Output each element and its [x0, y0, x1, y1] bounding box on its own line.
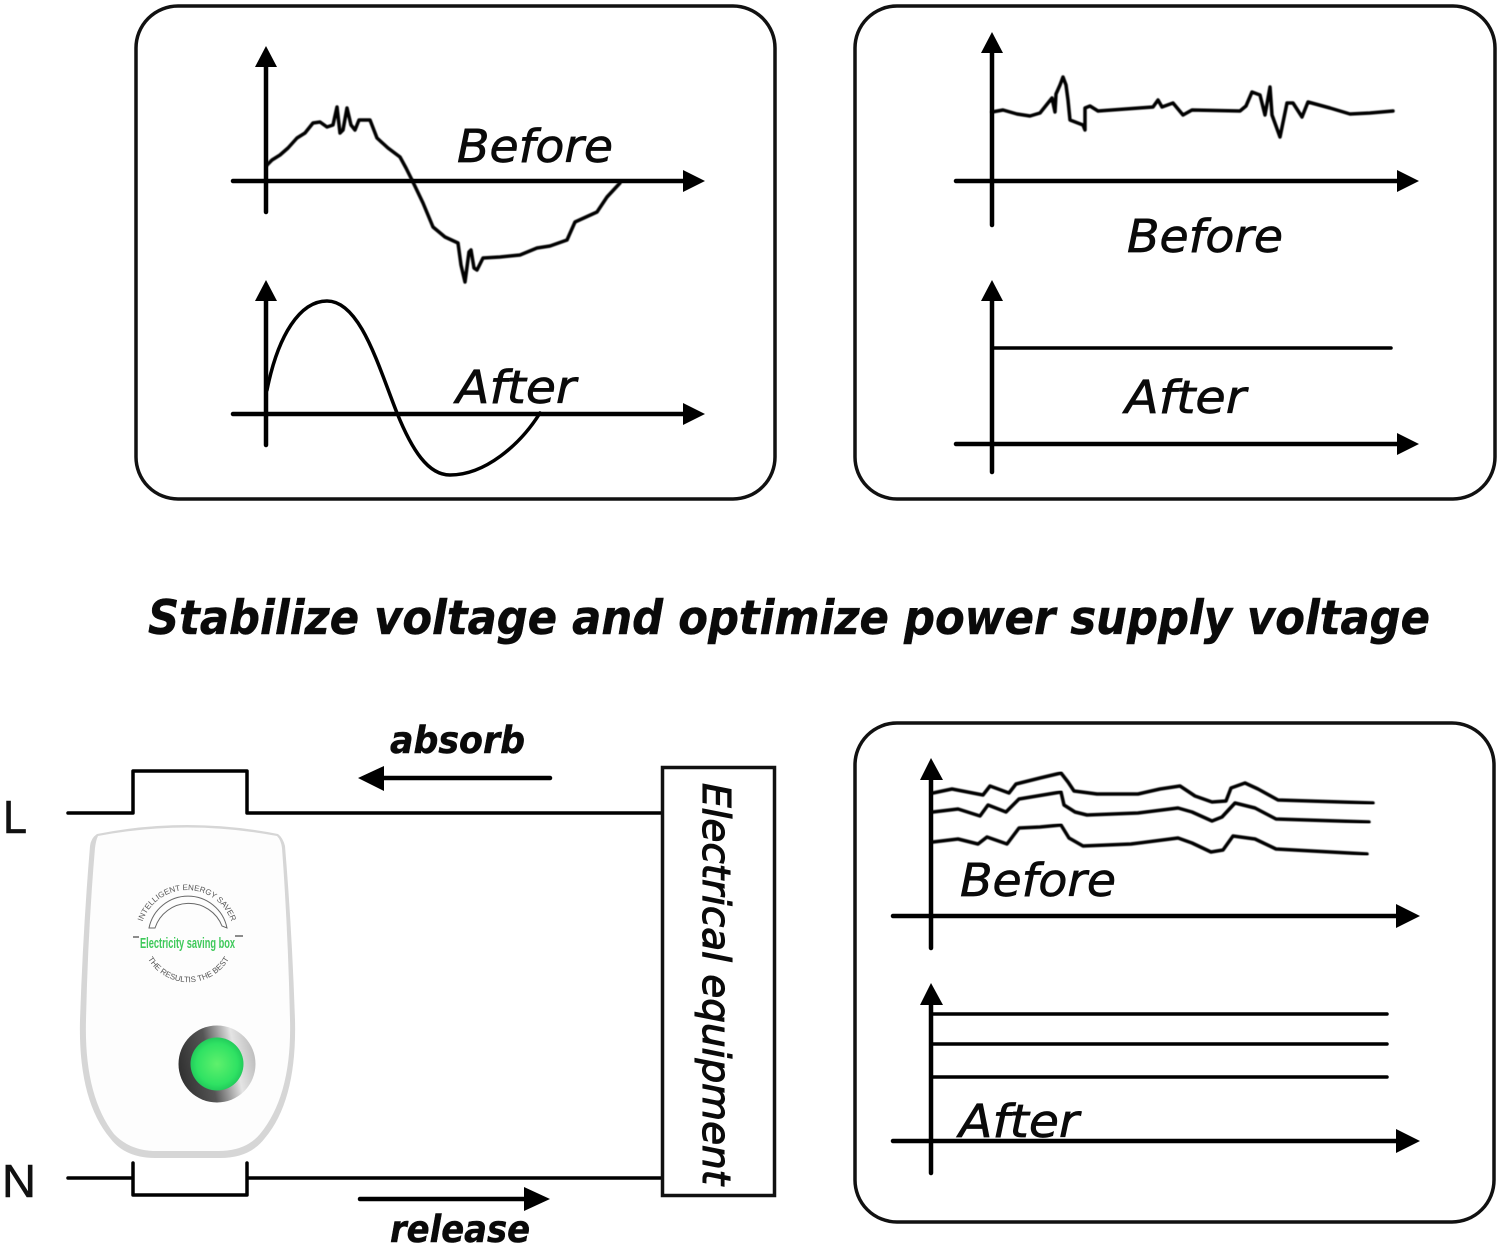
panel: three-phase lines before and after [855, 723, 1494, 1222]
device face [86, 828, 290, 1151]
logo: Electricity saving box [140, 935, 235, 952]
logo [133, 884, 243, 982]
L wire with inductor loop [68, 771, 662, 813]
device: electricity saving box [80, 825, 296, 1158]
arrow: absorb: absorb [390, 719, 525, 762]
chart: spiky line before [956, 32, 1419, 263]
box: electrical equipment: Electrical equipment [694, 783, 738, 1187]
label: Before: Before [457, 120, 613, 173]
chart: straight lines after [893, 983, 1420, 1173]
label: After: After [453, 361, 579, 414]
chart: clean sine after [233, 280, 705, 475]
label: L: L [3, 791, 27, 843]
box: electrical equipment [662, 768, 774, 1196]
chart: flat line after [956, 280, 1419, 472]
chart: wavy lines before [893, 758, 1420, 948]
device shell [80, 825, 295, 1158]
N wire with inductor loop [68, 1163, 662, 1195]
label: Before: Before [1127, 210, 1283, 263]
logo: THE RESULTIS THE BEST [148, 956, 228, 982]
panel: sine waveform before and after [136, 6, 775, 499]
indicator light [178, 1026, 256, 1102]
arrow: absorb [358, 719, 550, 791]
label: Before: Before [960, 854, 1116, 907]
panel: voltage spikes before and after [855, 6, 1495, 499]
arrow: release [360, 1187, 550, 1248]
logo: INTELLIGENT ENERGY SAVER [138, 884, 236, 922]
circuit diagram [2, 719, 774, 1248]
label: After: After [1122, 371, 1249, 424]
label: After: After [956, 1095, 1082, 1148]
chart: distorted sine before [233, 46, 705, 282]
label: N: N [2, 1155, 36, 1207]
title: Stabilize voltage and optimize power supply voltage [148, 591, 1430, 646]
